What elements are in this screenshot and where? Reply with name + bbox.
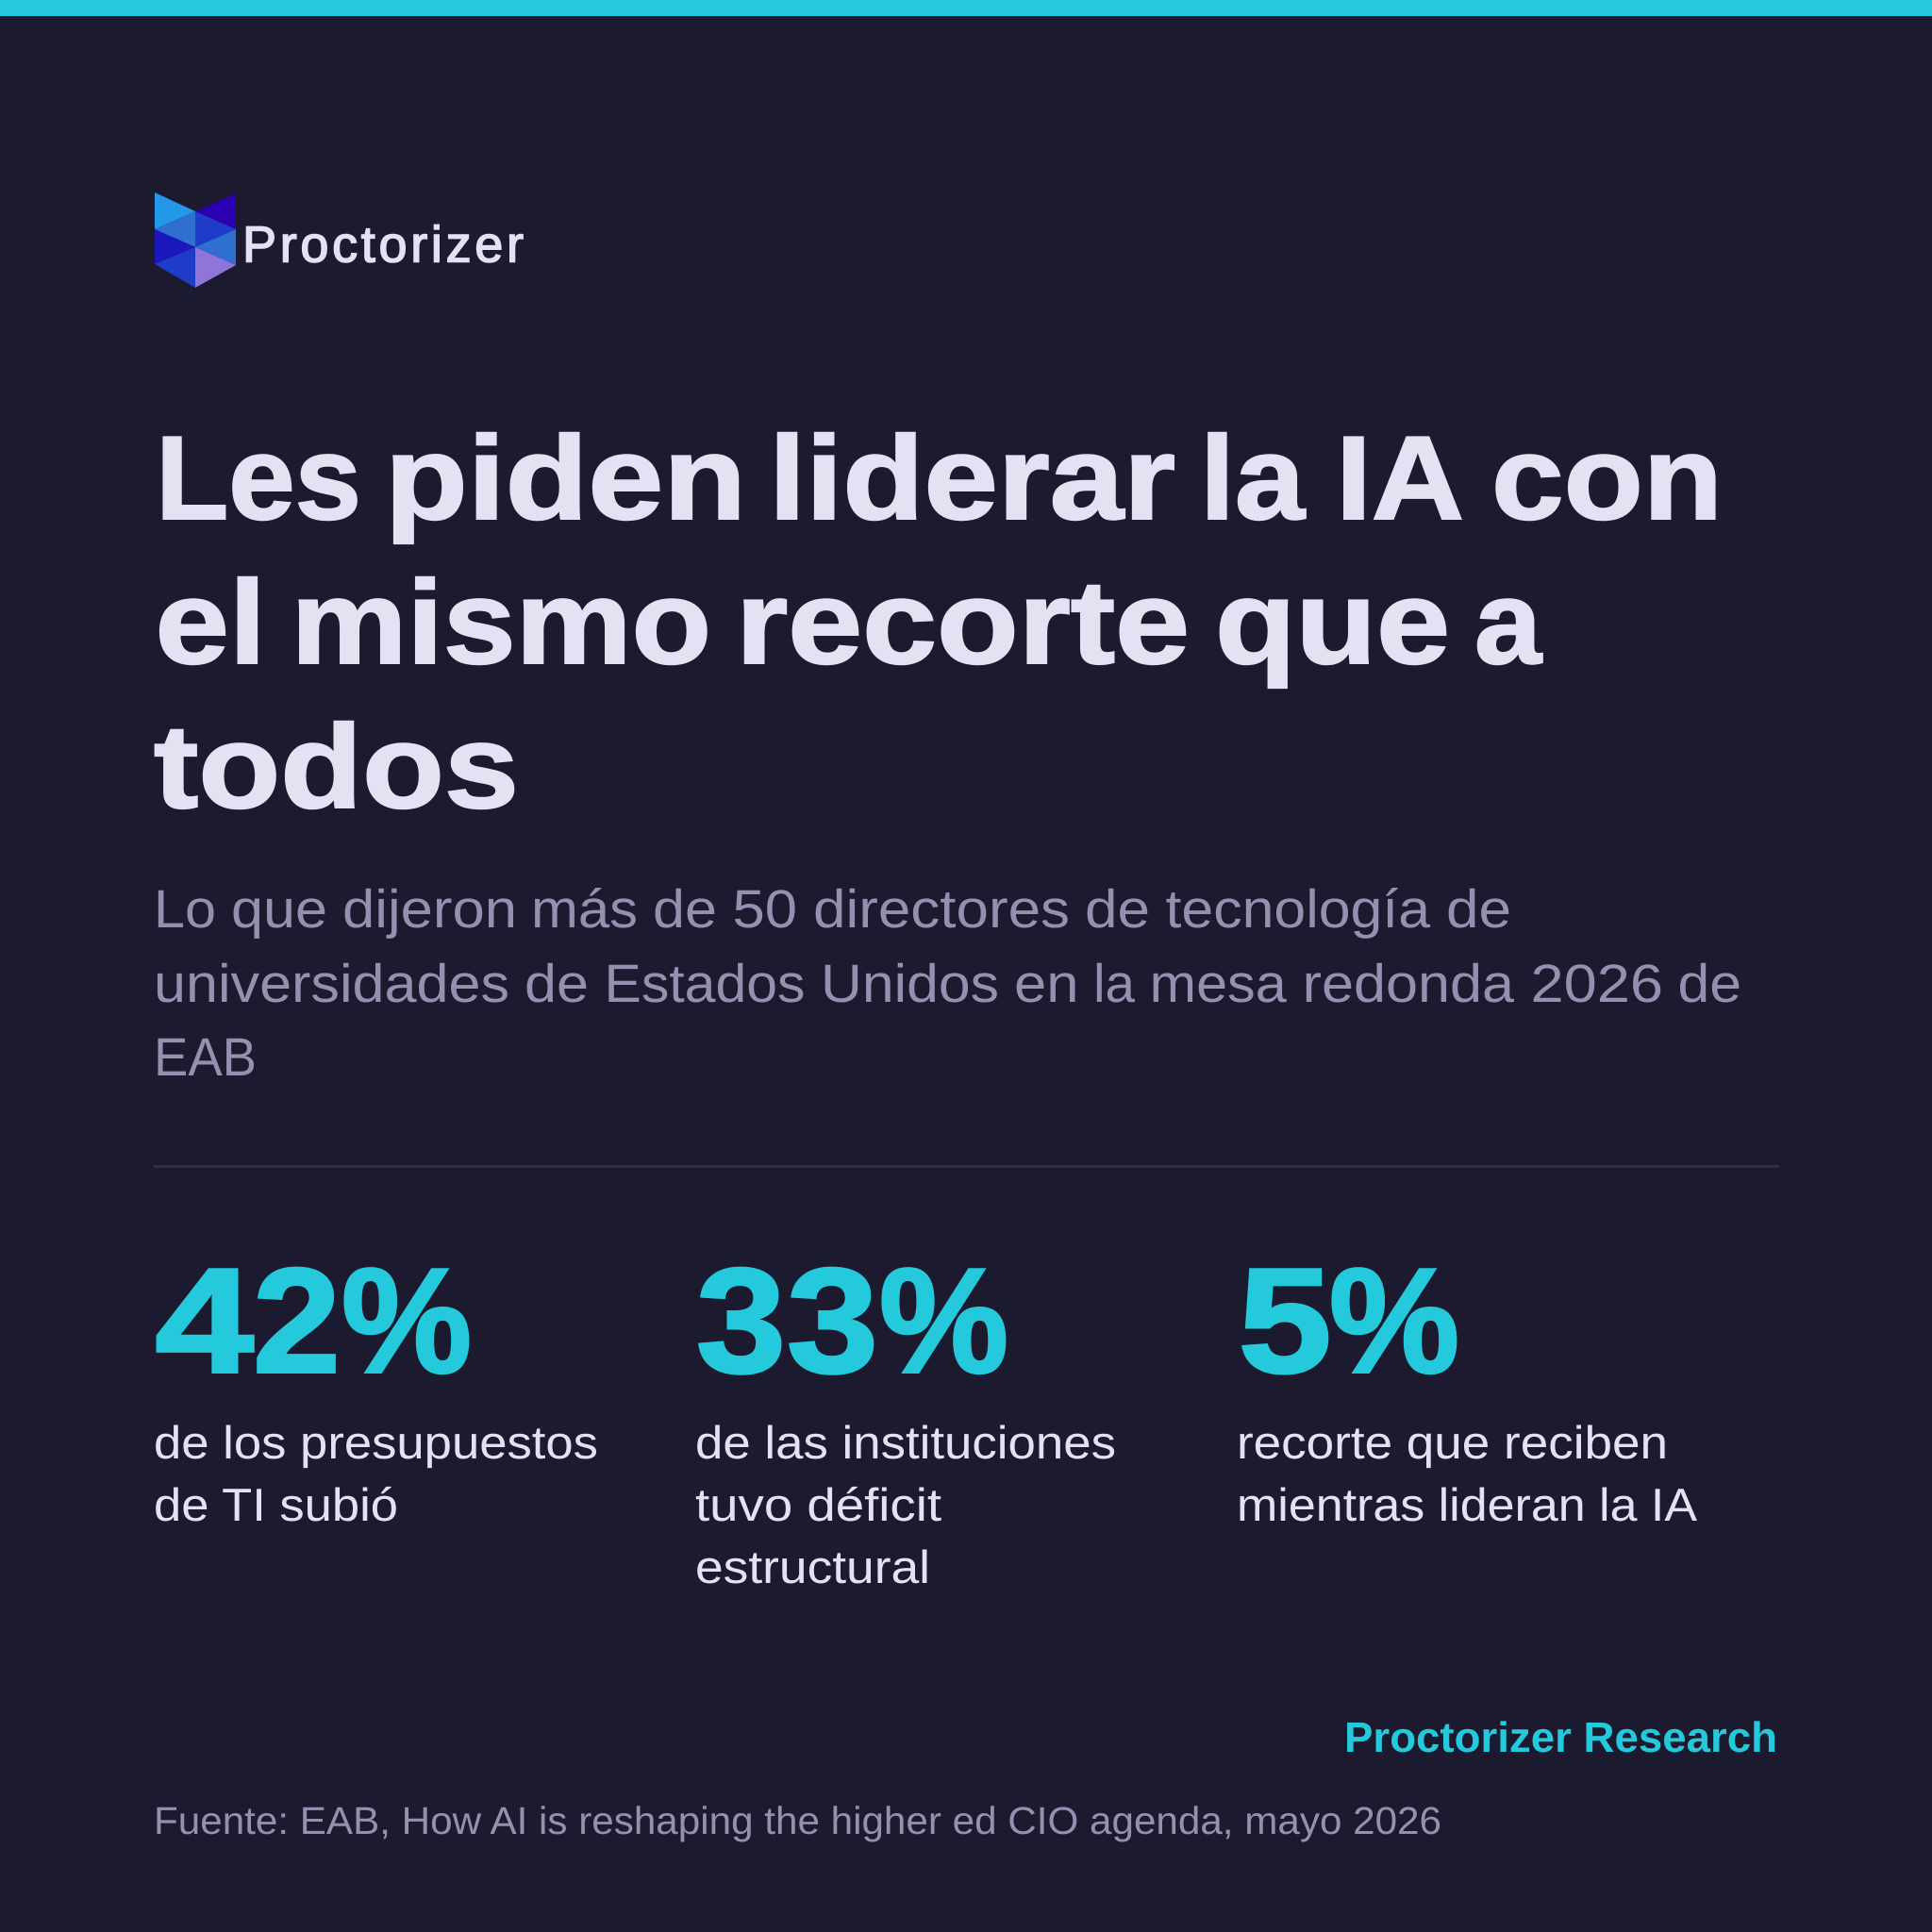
source note: Fuente: EAB, How AI is reshaping the higher ed CIO agenda, mayo 2026	[154, 1799, 1441, 1842]
stat value	[696, 1238, 1008, 1404]
title: mismo	[291, 556, 711, 689]
icon: faceted shield	[155, 192, 236, 288]
stat value: 4	[155, 1238, 254, 1404]
subtitle: de	[653, 879, 717, 940]
stat label: mientras lideran la IA	[1237, 1480, 1697, 1531]
stat label: de TI subió	[154, 1480, 398, 1531]
subtitle: más	[531, 879, 638, 940]
title: con	[1491, 411, 1723, 544]
stat value	[1239, 1238, 1459, 1404]
title: IA	[1336, 411, 1464, 544]
stat label: estructural	[695, 1542, 930, 1593]
stat label: de las instituciones	[695, 1418, 1116, 1469]
stat value: %	[341, 1238, 472, 1404]
stat label	[695, 1418, 1116, 1593]
stat label: de los presupuestos	[154, 1418, 598, 1469]
subtitle: mesa	[1150, 954, 1287, 1014]
subtitle: Lo	[154, 879, 216, 940]
subtitle: de	[1677, 954, 1741, 1014]
subtitle: Estados	[604, 954, 806, 1014]
title: el	[155, 556, 266, 689]
subtitle: 2026	[1530, 954, 1663, 1014]
title: liderar	[769, 411, 1175, 544]
title: que	[1215, 556, 1450, 689]
subtitle: en	[1014, 954, 1079, 1014]
top accent bar	[0, 0, 1932, 16]
subtitle: directores	[813, 879, 1070, 940]
panel: stat 42%	[154, 1238, 598, 1531]
subtitle: dijeron	[342, 879, 517, 940]
title: recorte	[736, 556, 1190, 689]
brand credit: Proctorizer Research	[1344, 1713, 1777, 1761]
title: Les	[156, 411, 361, 544]
stat value: %	[879, 1238, 1008, 1404]
title: piden	[385, 411, 746, 544]
stat value: 3	[696, 1238, 786, 1404]
stat value: %	[1329, 1238, 1459, 1404]
logo: Proctorizer	[155, 192, 524, 288]
subtitle: Unidos	[821, 954, 999, 1014]
subtitle: EAB	[154, 1027, 257, 1088]
stat label	[154, 1418, 598, 1531]
panel: stat 33%	[695, 1238, 1116, 1593]
title: a	[1474, 556, 1542, 689]
subtitle: la	[1093, 954, 1135, 1014]
stat value: 5	[1239, 1238, 1332, 1404]
subtitle: universidades	[154, 954, 509, 1014]
subtitle: de	[525, 954, 589, 1014]
stat value: 2	[253, 1238, 341, 1404]
subtitle: que	[231, 879, 327, 940]
subtitle: tecnología	[1166, 879, 1430, 940]
stat label: recorte que reciben	[1237, 1418, 1668, 1469]
subtitle: de	[1085, 879, 1150, 940]
title: la	[1200, 411, 1306, 544]
stat label	[1237, 1418, 1697, 1531]
logo wordmark: Proctorizer	[242, 217, 524, 274]
title	[154, 411, 1723, 833]
subtitle	[154, 879, 1741, 1088]
title: todos	[154, 700, 519, 833]
subtitle: redonda	[1303, 954, 1514, 1014]
stat value	[155, 1238, 472, 1404]
panel: stat 5%	[1237, 1238, 1697, 1531]
stat value: 3	[787, 1238, 878, 1404]
stat label: tuvo déficit	[695, 1480, 941, 1531]
subtitle: de	[1446, 879, 1511, 940]
subtitle: 50	[732, 879, 797, 940]
